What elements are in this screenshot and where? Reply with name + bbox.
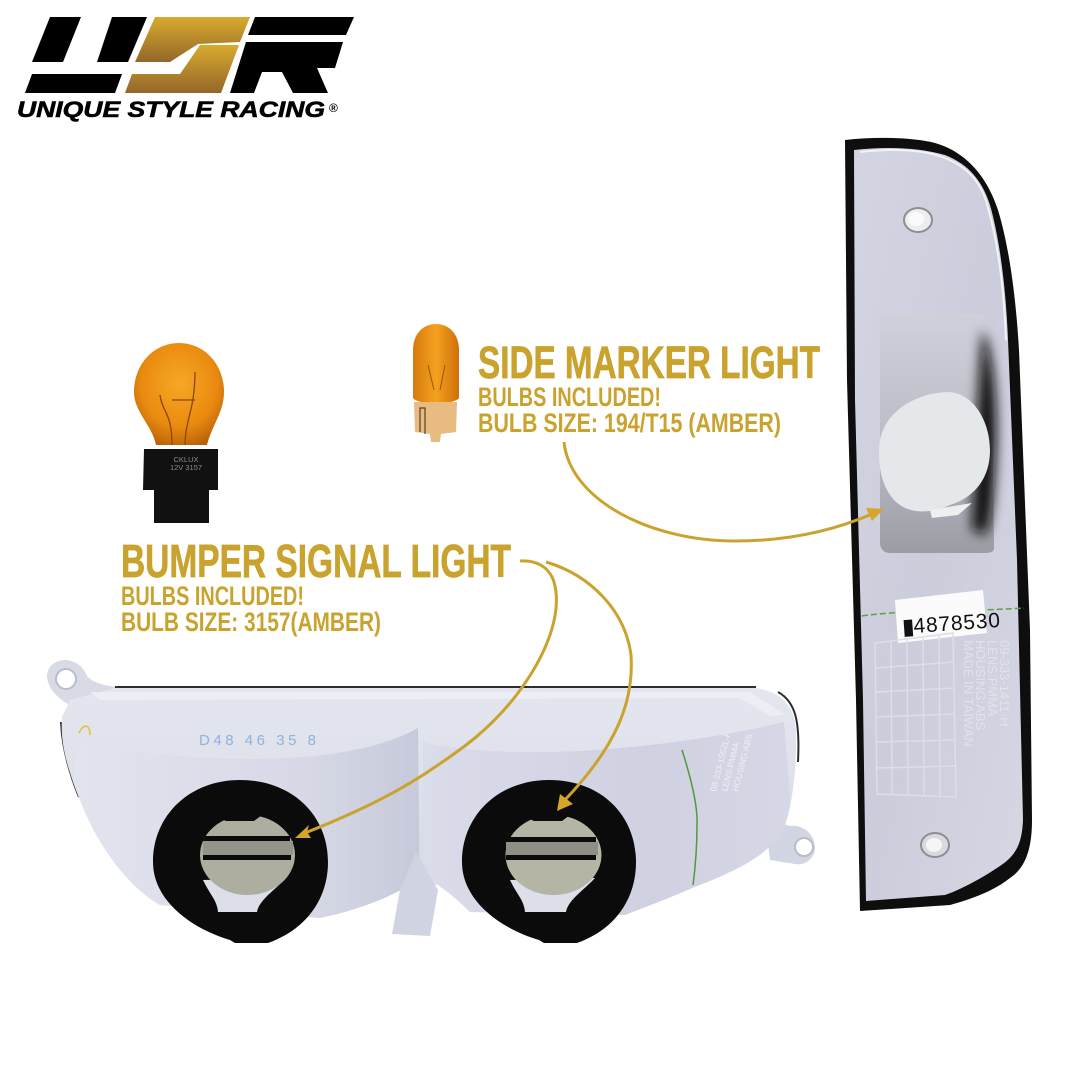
heading: bumper signal light: BUMPER SIGNAL LIGHT [121,535,511,587]
194 glass [413,324,459,403]
3157 filament [160,372,195,445]
marker bottom screw hole [921,833,949,857]
marker sealing cap [879,392,990,518]
3157 black base [143,449,218,523]
bulb: 3157 amber [134,343,224,523]
bumper right cup [436,722,790,915]
marker inner chrome edge [860,150,1006,340]
194 base [414,402,457,442]
marker moulded grid [875,633,956,797]
3157 base text: CKLUX [173,455,199,464]
bumper lobes [60,722,800,930]
bumper signal light housing: HOUSING:ABS [730,732,754,792]
marker barcode label [895,590,1001,643]
logo: Unique Style Racing [17,17,354,122]
text: bumper bulbs included: BULBS INCLUDED! [121,581,304,611]
marker moulded text [961,640,1012,747]
bulb: 3157 amber: 12V 3157 [170,463,202,472]
marker block shadow [972,330,996,535]
marker barcode label: ▮ [902,615,915,639]
3157 glass [134,343,224,445]
bumper centre tab [392,852,438,936]
marker raised block [880,314,994,553]
marker moulded text: HOUSING:ABS [973,640,988,731]
bumper moulded text: 08-333-1552L-F [708,731,733,792]
bumper top rim [90,692,786,716]
marker moulded text: LENS:PMMA [985,640,1000,717]
bumper main body [62,688,796,918]
bumper amber mark [79,726,90,735]
marker black outline [845,138,1032,911]
logo: gold S mark [125,17,250,93]
bumper mounting ear right [765,820,815,864]
logo: U mark [25,17,147,93]
marker moulded text: MADE IN TAIWAN [961,640,976,747]
text: side marker bulb size: BULB SIZE: 194/T15 (AMBER) [478,408,781,438]
194 wire [420,408,425,434]
arrow: side marker [564,442,884,541]
bumper signal light housing [47,660,815,943]
bulb socket right [462,780,636,943]
bulb: 194 amber [413,324,459,442]
bumper left cup [60,728,420,930]
logo registered mark: ® [329,101,338,115]
marker grey body [854,148,1023,901]
bumper ear holes [56,669,813,856]
heading: side marker light: SIDE MARKER LIGHT [478,337,820,388]
marker moulded text: 09-333-1411-H [997,640,1012,726]
bumper stamped code: D48 46 35 8 [199,732,316,749]
194 filament [428,365,445,390]
arrow: bumper left socket [295,561,556,838]
marker top screw hole [904,208,932,232]
bumper dark lens edge [61,687,798,797]
bumper signal light housing: LENS:PMMA [719,741,741,792]
bulb socket left [153,780,328,943]
logo wordmark: UNIQUE STYLE RACING [17,97,325,122]
text: side marker bulbs included: BULBS INCLUDED! [478,382,661,412]
arrow: bumper right socket [546,562,631,811]
logo: R mark [230,17,354,93]
marker barcode label: 4878530 [913,609,1001,638]
marker green seam [862,608,1024,616]
bumper green mark [682,750,697,885]
text: bumper bulb size: BULB SIZE: 3157(AMBER) [121,607,381,637]
side marker light housing [845,138,1032,911]
bumper mounting ear left [47,660,118,720]
